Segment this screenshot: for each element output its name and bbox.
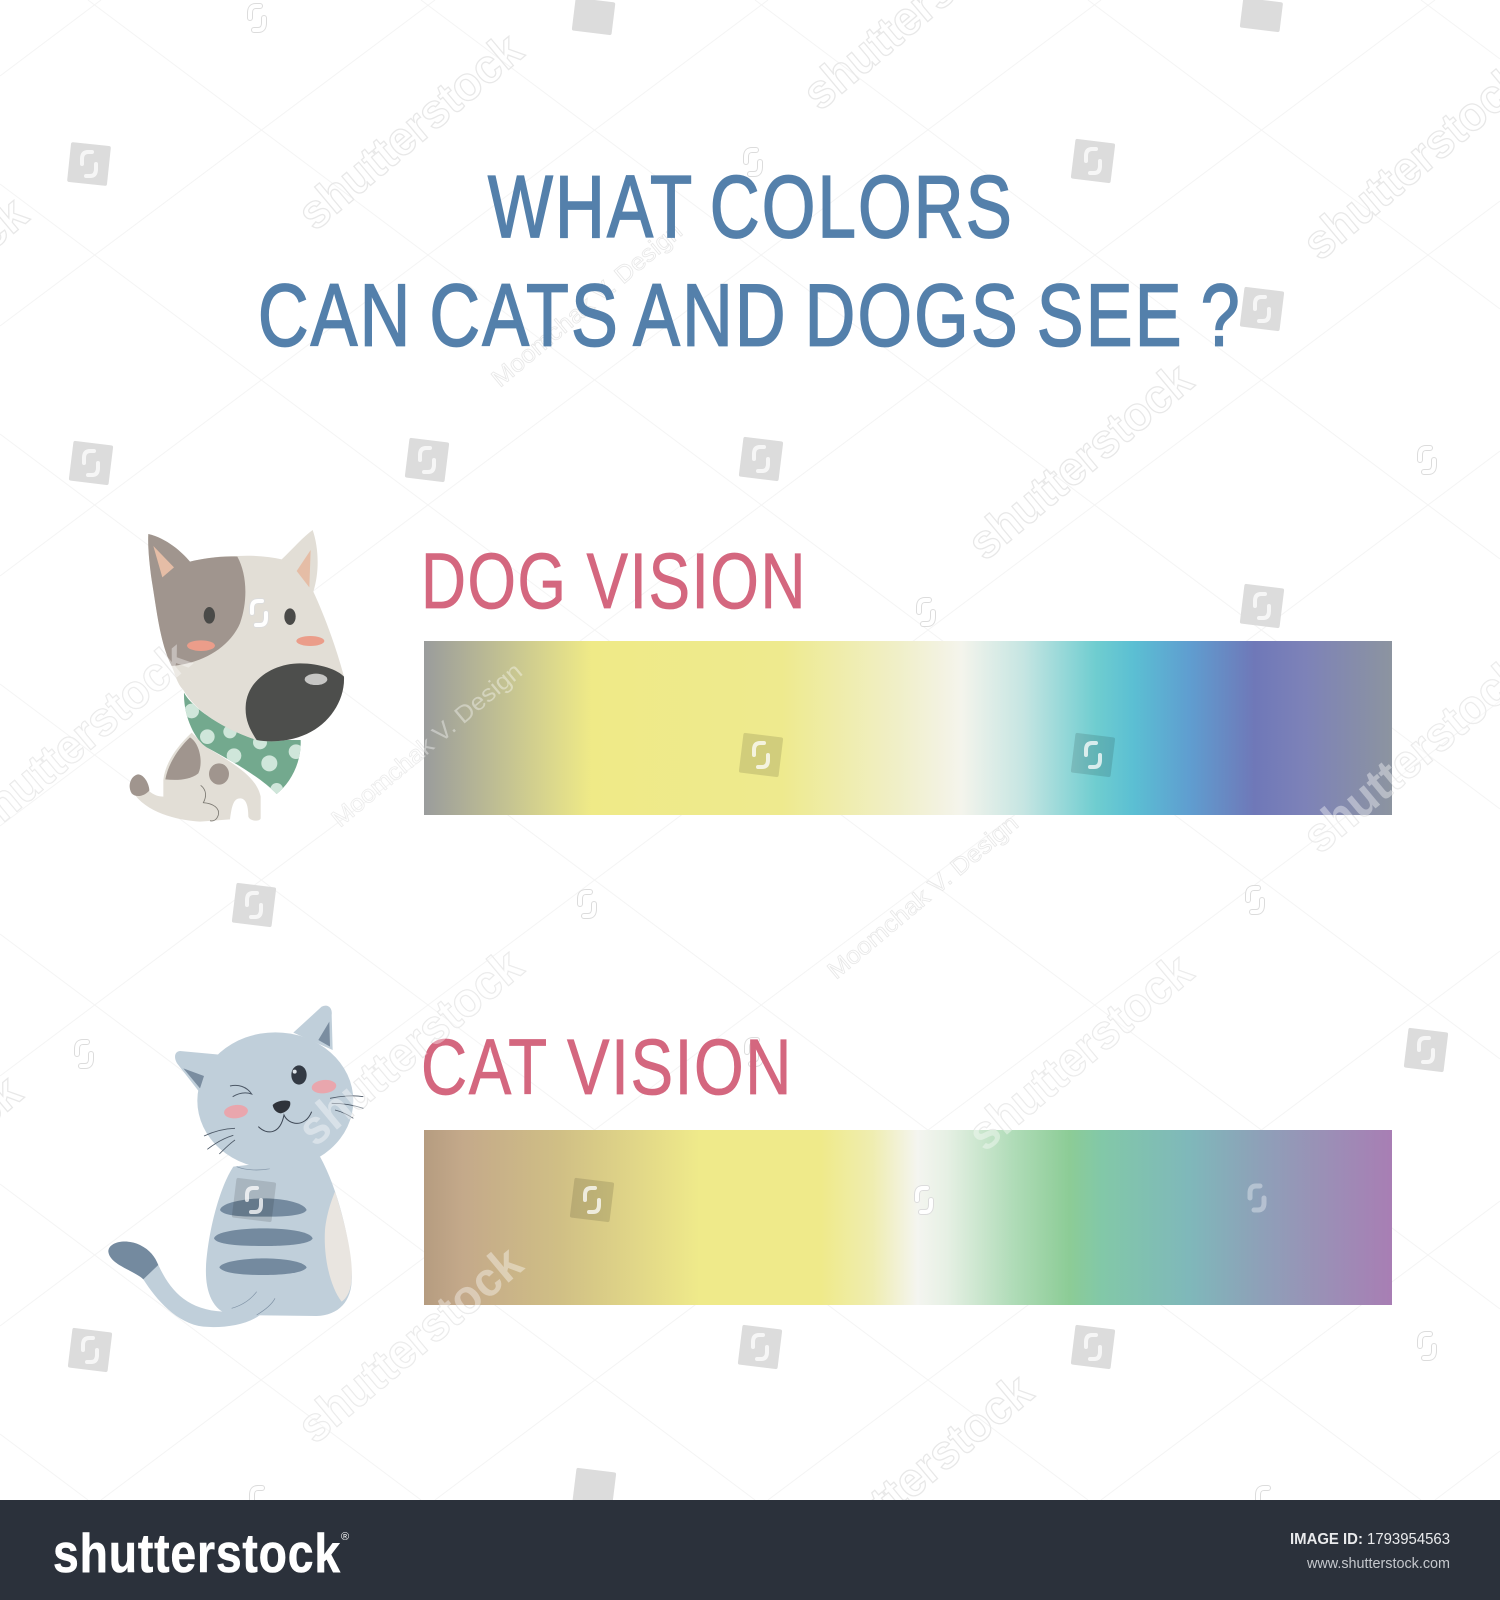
watermark text over artwork: Moomchak V. Design bbox=[327, 658, 528, 833]
cat nose bbox=[273, 1101, 290, 1113]
watermark squares over bars bbox=[232, 733, 1115, 1222]
watermark logo marks bbox=[82, 149, 1433, 1362]
watermark text over artwork: shutterstock bbox=[288, 939, 533, 1156]
dog tail tip bbox=[130, 774, 149, 796]
watermark logo near cat label bbox=[747, 1040, 761, 1064]
watermark text layer: shutterstock bbox=[288, 939, 533, 1156]
watermark text layer: Moomchak V. Design bbox=[487, 218, 688, 393]
dog head bbox=[148, 530, 344, 741]
dog body bbox=[135, 733, 261, 822]
label: cat vision: CAT VISION bbox=[421, 1022, 793, 1111]
footer bar bbox=[0, 1500, 1500, 1600]
cat eye bbox=[291, 1065, 307, 1085]
cat whiskers bbox=[204, 1096, 363, 1154]
dog cheeks bbox=[187, 636, 324, 651]
footer logo: shutterstock bbox=[53, 1522, 341, 1584]
cat stripes bbox=[214, 1198, 313, 1275]
title: WHAT COLORS bbox=[488, 157, 1014, 256]
cat mouth bbox=[258, 1112, 312, 1132]
dog eyes bbox=[204, 607, 296, 625]
watermark text layer: shutterstock bbox=[958, 944, 1203, 1161]
dog body patches bbox=[165, 737, 201, 780]
cat wink bbox=[230, 1085, 252, 1097]
dog nose bbox=[246, 663, 344, 741]
cat tail lines bbox=[232, 1167, 275, 1315]
footer image id: IMAGE ID: 1793954563 bbox=[1290, 1531, 1450, 1548]
cat body bbox=[206, 1157, 352, 1316]
dog vision gradient bar bbox=[424, 641, 1392, 815]
watermark text over artwork: shutterstock bbox=[288, 1236, 533, 1453]
dog head patch bbox=[148, 534, 245, 666]
cat head bbox=[197, 1032, 353, 1169]
cat cheeks bbox=[223, 1079, 337, 1120]
cat vision gradient bar bbox=[424, 1130, 1392, 1305]
icon: cat bbox=[108, 1006, 363, 1327]
icon: dog bbox=[130, 530, 344, 822]
title: CAN CATS AND DOGS SEE ? bbox=[258, 266, 1242, 364]
footer url: www.shutterstock.com bbox=[1306, 1555, 1450, 1572]
cat belly bbox=[325, 1192, 352, 1302]
watermark text layer: Moomchak V. Design bbox=[823, 810, 1024, 985]
dog ears inner bbox=[153, 546, 311, 587]
watermark text layer: shutterstock bbox=[288, 1236, 533, 1453]
dog nose highlight bbox=[305, 674, 327, 685]
watermark text layer: shutterstock bbox=[798, 1364, 1043, 1581]
cat tail tip bbox=[108, 1242, 158, 1279]
watermark text over artwork bbox=[0, 631, 1500, 1453]
dog scarf bbox=[184, 693, 303, 796]
title bbox=[258, 157, 1242, 364]
footer registered mark: ® bbox=[341, 1531, 349, 1543]
watermark text layer: shutterstock bbox=[288, 23, 533, 240]
watermark text layer: Moomchak V. Design bbox=[327, 658, 528, 833]
cat tail bbox=[143, 1265, 260, 1327]
watermark text layer: shutterstock bbox=[958, 353, 1203, 570]
cat ears bbox=[175, 1006, 333, 1095]
cat ears inner bbox=[183, 1022, 330, 1088]
watermark text over artwork: shutterstock bbox=[958, 944, 1203, 1161]
label: dog vision: DOG VISION bbox=[421, 536, 807, 625]
